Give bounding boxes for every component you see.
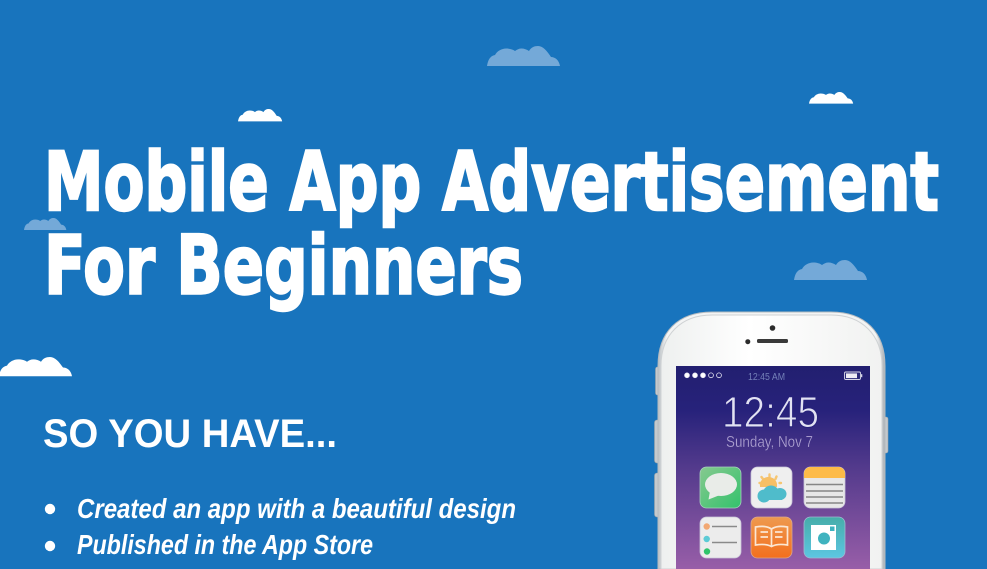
- bullet list: Created an app with a beautiful design: [77, 493, 516, 524]
- phone body: [658, 312, 885, 569]
- phone face: [661, 315, 882, 569]
- cloud: top right: [809, 92, 853, 104]
- camera: [770, 325, 775, 331]
- status dots: [685, 373, 721, 378]
- cloud: left of title: [24, 218, 66, 230]
- speaker: [757, 339, 788, 343]
- status time: 12:45 AM: [748, 372, 785, 383]
- cloud: lower left: [0, 357, 72, 376]
- title: [44, 136, 939, 314]
- icon: weather: [751, 467, 792, 508]
- title: For Beginners: [44, 220, 523, 314]
- screen: [676, 366, 870, 569]
- icon: notes: [804, 467, 845, 508]
- icon: reminders: [700, 517, 741, 558]
- phone illustration: [654, 312, 888, 569]
- bullet list: Published in the App Store: [77, 529, 373, 560]
- cloud: top centre: [487, 46, 560, 66]
- clock: 12:45: [722, 388, 819, 437]
- cloud: right of title: [794, 260, 867, 280]
- heading: so you have: SO YOU HAVE...: [43, 412, 337, 456]
- sensor: [745, 339, 750, 344]
- bullet list: [45, 493, 516, 560]
- cloud: top left: [238, 109, 282, 121]
- battery: [844, 372, 862, 380]
- date: Sunday, Nov 7: [726, 434, 813, 451]
- icon: messages: [700, 467, 741, 508]
- icon: book: [751, 517, 792, 558]
- side buttons: [654, 367, 888, 517]
- icon: camera: [804, 517, 845, 558]
